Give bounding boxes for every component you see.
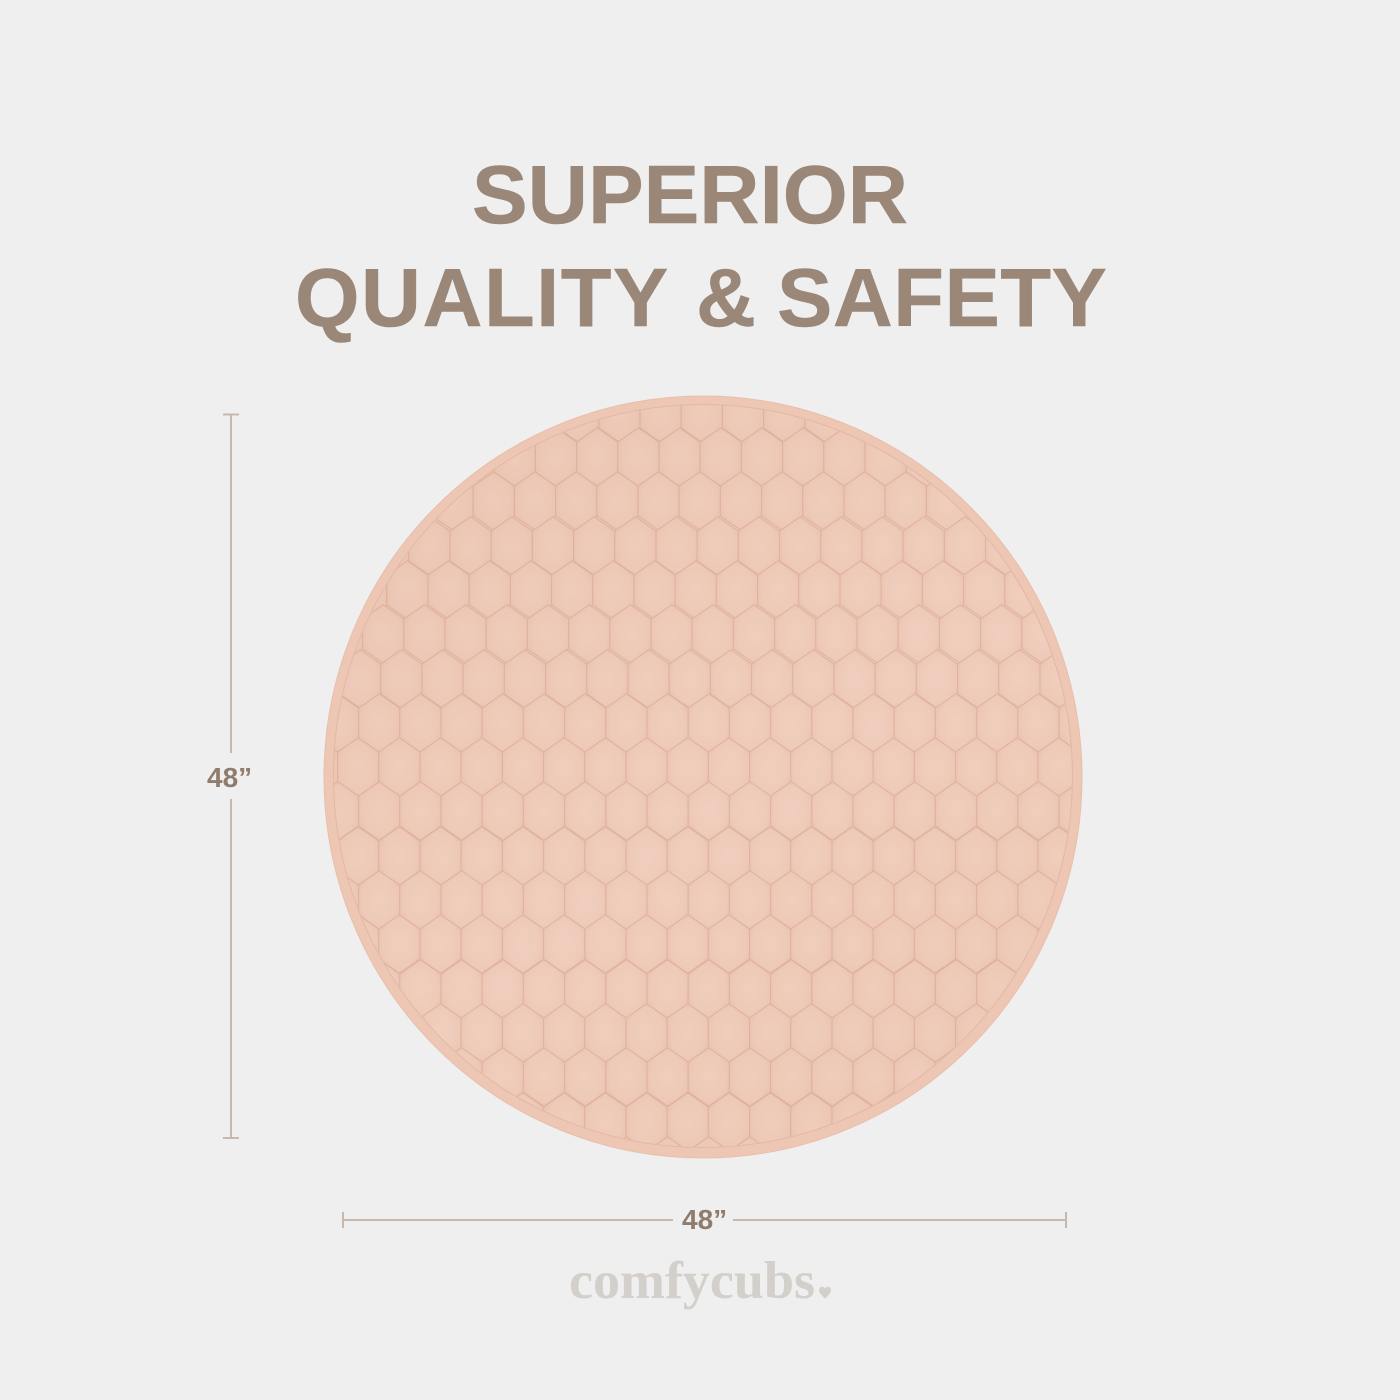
mat lighting <box>334 405 1072 1147</box>
width line <box>343 1212 1066 1228</box>
height label: 48” <box>207 762 252 793</box>
height line <box>223 414 239 1138</box>
width dimension line <box>343 1204 1066 1235</box>
title line 2: & <box>696 251 756 344</box>
honeycomb quilting <box>334 406 1072 1147</box>
width label: 48” <box>682 1204 727 1235</box>
mat piping rim <box>324 396 1082 1158</box>
title line 2: SAFETY <box>777 251 1107 344</box>
title line 1: SUPERIOR <box>472 148 908 241</box>
height dimension line <box>207 414 252 1138</box>
icon: heart <box>819 1287 831 1298</box>
round quilted play mat <box>324 396 1082 1158</box>
rim stitch line <box>334 404 1072 1148</box>
wordmark: comfycubs <box>569 1252 815 1310</box>
title line 2: QUALITY <box>295 251 670 344</box>
brand logo <box>569 1252 831 1310</box>
title <box>295 148 1107 344</box>
